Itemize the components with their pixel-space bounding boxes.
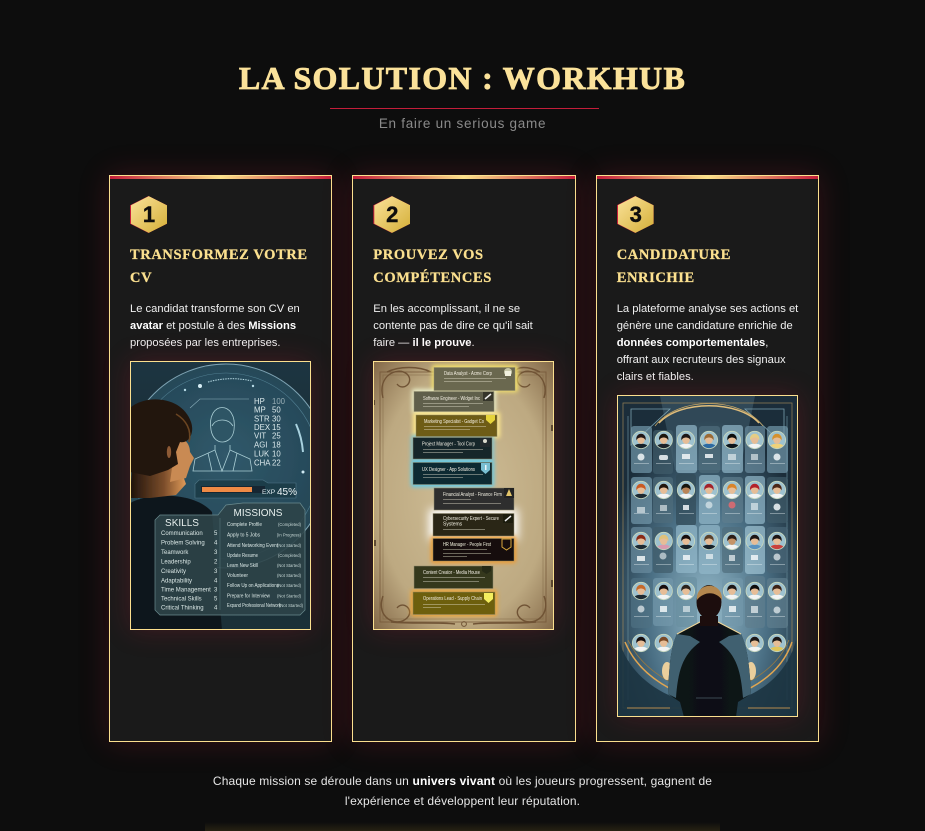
skills and missions panels (155, 503, 305, 615)
text: step 2: En les accomplissant, il ne se (373, 303, 520, 315)
panel: step 3 (596, 175, 819, 742)
heading: step 2 (373, 247, 492, 286)
light beams and deco frame (660, 396, 755, 470)
text: step 2: contente pas de dire ce qu'il sait (373, 320, 533, 332)
avatar outline (193, 408, 252, 471)
skills and missions panels: Expand Professional Network (227, 603, 281, 609)
text: step 3 (617, 303, 798, 383)
closing text: l'expérience et développent leur réputation. (345, 794, 580, 808)
quest cards: Cybersecurity Expert - Secure (443, 516, 499, 522)
HUD circle: EXP (262, 489, 276, 496)
skills and missions panels: Critical Thinking (161, 606, 204, 612)
title: LA SOLUTION : WORKHUB (239, 60, 686, 96)
skills and missions panels: 4 (214, 540, 218, 546)
card list (413, 368, 515, 614)
text: step 3: offrant aux recruteurs des signaux (617, 354, 786, 366)
skills and missions panels: (Not Started) (277, 563, 302, 568)
edge stains (373, 400, 554, 587)
skills and missions panels: (Not Started) (277, 583, 302, 588)
heading: step 3: CANDIDATURE (617, 247, 731, 263)
icon: hexagon number 2: 2 (386, 202, 398, 227)
top gradient bar (110, 176, 331, 179)
quest cards: Project Manager - Tool Corp (422, 442, 475, 448)
stats: LUK (254, 450, 270, 458)
heading: step 1: CV (130, 270, 152, 286)
skills and missions panels: (Completed) (278, 553, 302, 558)
skills and missions panels: (In Progress) (277, 532, 302, 538)
quest cards: Data Analyst - Acme Corp (444, 371, 492, 377)
stats: AGI (254, 440, 267, 450)
panel: step 2 (352, 175, 576, 742)
text: step 1: avatar et postule à des Missions (130, 320, 296, 332)
badges (504, 368, 512, 376)
recruiter seen from behind (662, 585, 756, 717)
stats: 25 (272, 432, 281, 440)
closing text: Chaque mission se déroule dans un univers vivant où les joueurs progressent, gagnent de (213, 774, 712, 788)
ornaments (380, 368, 546, 626)
skills and missions panels: 5 (214, 531, 218, 537)
illustration: avatar, skills and missions (130, 361, 311, 630)
icon: hexagon number 1 (130, 196, 167, 233)
text: step 3: génère une candidature enrichie de (617, 320, 793, 332)
skills and missions panels: 5 (214, 596, 218, 602)
quest cards: Systems (443, 522, 463, 528)
heading: step 3 (616, 247, 731, 286)
skills and missions panels: Leadership (161, 560, 191, 566)
icon: hexagon number 3 (617, 196, 654, 233)
avatars (632, 431, 785, 652)
quest cards (413, 368, 515, 614)
icon: hexagon number 3: 3 (630, 202, 642, 227)
heading: step 2: PROUVEZ VOS (373, 247, 484, 263)
skills and missions panels: 4 (214, 578, 218, 584)
text: step 3: La plateforme analyse ses actions et (617, 303, 798, 315)
text: step 3: clairs et fiables. (617, 371, 694, 383)
title underline (330, 108, 599, 109)
skills and missions panels: (Not Started) (277, 543, 302, 548)
text: step 1: Le candidat transforme son CV en (130, 303, 300, 315)
top gradient bar (597, 176, 818, 179)
skills and missions panels: (Not Started) (277, 594, 302, 598)
quest cards: Marketing Specialist - Gadget Co (424, 419, 484, 425)
skills and missions panels: (Not Started) (277, 573, 302, 578)
text: step 3: données comportementales, (617, 337, 768, 349)
skills and missions panels: Creativity (161, 569, 186, 575)
text: step 1: proposées par les entreprises. (130, 337, 280, 349)
faint description lines (423, 378, 506, 608)
text: step 2 (373, 303, 533, 349)
HUD circle (124, 364, 328, 568)
quest cards: Software Engineer - Widget Inc (423, 396, 481, 402)
icon: hexagon number 1: 1 (143, 202, 155, 227)
skills and missions panels: Problem Solving (161, 540, 205, 546)
heading: step 1: TRANSFORMEZ VOTRE (130, 247, 308, 263)
skills and missions panels: (Completed) (278, 522, 302, 527)
stats: STR (254, 414, 270, 424)
quest cards: UX Designer - App Solutions (422, 467, 476, 473)
person (130, 399, 222, 630)
skills and missions panels: (Not Started) (279, 603, 304, 608)
stats (254, 397, 286, 468)
gold lower arc and dark base (617, 640, 798, 717)
heading: step 3: ENRICHIE (617, 270, 695, 286)
subtitle: En faire un serious game (379, 116, 546, 131)
stats: 30 (272, 414, 281, 424)
stats: 18 (272, 440, 281, 450)
stats: VIT (254, 432, 266, 440)
quest cards: Financial Analyst - Finance Firm (443, 492, 502, 498)
quest cards: Content Creator - Media House (423, 570, 480, 576)
closing text (213, 774, 712, 808)
skills and missions panels: Prepare for Interview (227, 594, 271, 600)
HUD circle: 45% (277, 487, 297, 498)
profile cards (631, 425, 788, 628)
text: step 2: faire — il le prouve. (373, 337, 475, 349)
skills and missions panels: Follow Up on Applications (227, 583, 279, 589)
stats: 100 (272, 397, 286, 406)
stats: HP (254, 397, 265, 406)
text: step 1 (130, 303, 300, 349)
stats: 10 (272, 450, 281, 458)
quest cards: HR Manager - People First (443, 542, 492, 548)
stats: DEX (254, 423, 271, 432)
skills and missions panels: SKILLS (165, 518, 199, 529)
quest cards: Operations Lead - Supply Chain (423, 596, 482, 602)
EXP bar (195, 480, 296, 498)
skills and missions panels: Attend Networking Event (227, 543, 278, 549)
stats: CHA (254, 458, 271, 468)
bottom gold glow (205, 822, 720, 831)
skills and missions panels: Teamwork (161, 550, 189, 556)
illustration: parchment quest board (373, 361, 554, 630)
small white icons (637, 454, 780, 614)
skills and missions panels: Learn New Skill (227, 563, 258, 569)
icon: hexagon number 2 (373, 196, 410, 233)
skills and missions panels: Complete Profile (227, 522, 262, 528)
skills and missions panels: Apply to 5 Jobs (227, 532, 260, 538)
skills and missions panels: 3 (214, 550, 218, 556)
skills and missions panels: Communication (161, 531, 203, 537)
skills and missions panels: 3 (214, 588, 218, 594)
stats: 50 (272, 406, 281, 414)
faint label lines (634, 463, 785, 617)
skills and missions panels: Volunteer (227, 573, 248, 579)
panel: step 1 (109, 175, 332, 742)
skills and missions panels: Technical Skills (161, 596, 202, 602)
skills and missions panels: 4 (214, 606, 218, 612)
stats: MP (254, 406, 266, 414)
skills and missions panels: Update Resume (227, 553, 258, 559)
glows (411, 365, 518, 616)
top gradient bar (353, 176, 575, 179)
stats: 15 (272, 423, 281, 432)
heading: step 2: COMPÉTENCES (373, 270, 492, 286)
skills and missions panels: Adaptability (161, 578, 192, 584)
skills and missions panels: 2 (214, 560, 218, 566)
skills and missions panels: MISSIONS (234, 508, 283, 519)
heading: step 1 (130, 247, 308, 286)
illustration: recruiter facing candidate profiles (617, 395, 798, 717)
skills and missions panels: Time Management (161, 588, 211, 594)
stats: 22 (272, 458, 281, 468)
skills and missions panels: 3 (214, 569, 218, 575)
